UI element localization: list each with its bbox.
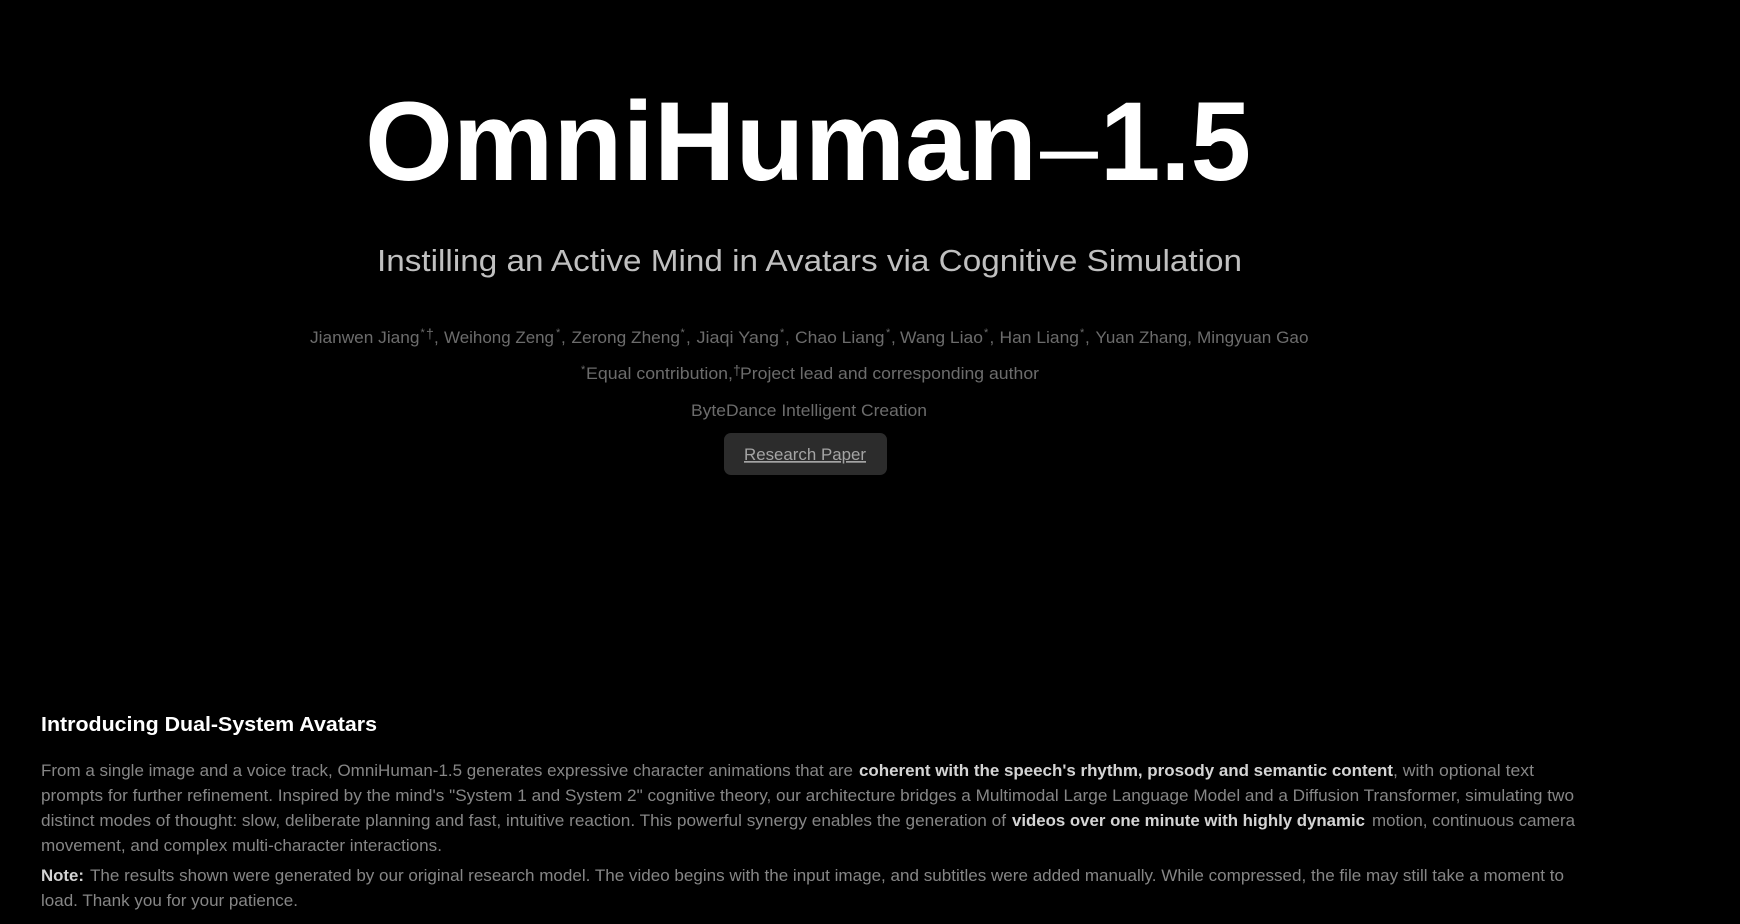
description paragraph: From a single image and a voice track, OmniHuman-1.5 generates expressive character animations that are <box>41 761 853 780</box>
authors: Zerong Zheng <box>572 328 680 347</box>
author notes <box>581 362 1039 383</box>
title: - <box>1030 99 1108 199</box>
button: research paper <box>724 433 887 475</box>
authors: , <box>990 328 994 347</box>
affiliation: ByteDance Intelligent Creation <box>691 401 927 420</box>
description paragraph: prompts for further refinement. Inspired by the mind's "System 1 and System 2" cognitive theory, our architecture bridges a Multimodal Large Language Model and a Diffusion Transformer, simulating two <box>41 786 1574 805</box>
authors: * <box>984 327 989 339</box>
author notes: Project lead and corresponding author <box>740 364 1039 383</box>
description paragraph: videos over one minute with highly dynamic <box>1012 811 1365 830</box>
authors: , <box>891 328 896 347</box>
description paragraph: movement, and complex multi-character interactions. <box>41 836 442 855</box>
title: 1.5 <box>1100 79 1251 204</box>
authors: * <box>556 327 561 339</box>
authors: Chao Liang <box>795 328 884 347</box>
authors: , <box>561 328 566 347</box>
authors: * <box>1080 327 1085 339</box>
description paragraph <box>41 761 1576 855</box>
note paragraph <box>41 866 1564 910</box>
description paragraph: , with optional text <box>1393 761 1534 780</box>
description paragraph: distinct modes of thought: slow, deliberate planning and fast, intuitive reaction. This powerful synergy enables the generation of <box>41 811 1006 830</box>
authors: * <box>680 327 686 339</box>
section heading: Introducing Dual-System Avatars <box>41 714 377 736</box>
authors: , <box>785 328 790 347</box>
author notes: * <box>581 364 586 376</box>
note paragraph: The results shown were generated by our original research model. The video begins with the input image, and subtitles were added manually. While compressed, the file may still take a moment to <box>90 866 1564 885</box>
authors: Jiaqi Yang <box>696 328 779 347</box>
authors: , <box>434 328 439 347</box>
description paragraph: motion, continuous camera <box>1372 811 1576 830</box>
authors: Mingyuan Gao <box>1197 328 1308 347</box>
authors: Yuan Zhang, <box>1096 328 1192 347</box>
authors: † <box>426 326 434 342</box>
authors: Wang Liao <box>900 328 983 347</box>
subtitle: Instilling an Active Mind in Avatars via Cognitive Simulation <box>377 243 1242 278</box>
authors: , <box>1085 328 1090 347</box>
note paragraph: Note: <box>41 866 84 885</box>
authors: * <box>886 327 891 339</box>
authors: * <box>420 327 426 339</box>
author notes: Equal contribution, <box>586 364 733 383</box>
button: research paper: Research Paper <box>744 445 866 464</box>
note paragraph: load. Thank you for your patience. <box>41 891 298 910</box>
authors: Han Liang <box>1000 328 1079 347</box>
title: OmniHuman <box>365 79 1037 204</box>
authors: Jianwen Jiang <box>310 328 420 347</box>
authors: , <box>686 328 691 347</box>
author notes: † <box>733 362 741 378</box>
authors <box>310 326 1308 347</box>
authors: * <box>780 327 785 339</box>
description paragraph: coherent with the speech's rhythm, prosody and semantic content <box>859 761 1393 780</box>
authors: Weihong Zeng <box>444 328 554 347</box>
